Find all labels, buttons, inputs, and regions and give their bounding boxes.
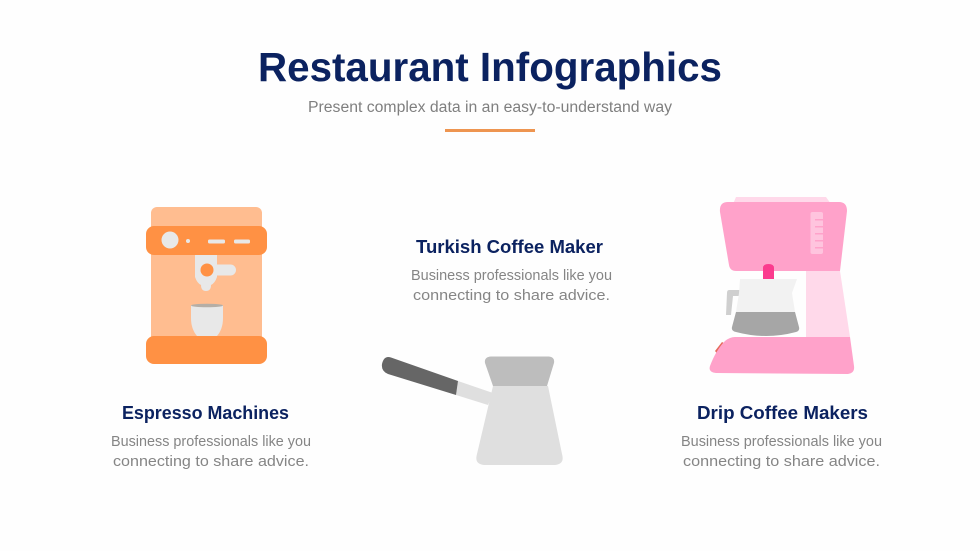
text: turkish description: connecting to share advice. (413, 287, 610, 304)
text: espresso description (111, 433, 311, 470)
title: Restaurant Infographics (258, 44, 722, 90)
icon: drip coffee maker (710, 197, 854, 374)
icon: turkish coffee pot (382, 356, 563, 465)
text: turkish description: Business professionals like you (411, 267, 612, 284)
heading: drip coffee makers: Drip Coffee Makers (697, 402, 868, 423)
text: espresso description: connecting to share advice. (113, 453, 309, 470)
text: turkish description (411, 267, 612, 304)
text: drip description (681, 433, 882, 470)
title underline (445, 129, 535, 132)
heading: espresso machines: Espresso Machines (122, 402, 289, 423)
icon: espresso machine (146, 207, 267, 364)
heading: turkish coffee maker: Turkish Coffee Maker (416, 236, 603, 257)
subtitle: Present complex data in an easy-to-understand way (308, 99, 672, 116)
text: drip description: Business professionals like you (681, 433, 882, 450)
text: drip description: connecting to share advice. (683, 453, 880, 470)
text: espresso description: Business professionals like you (111, 433, 311, 450)
